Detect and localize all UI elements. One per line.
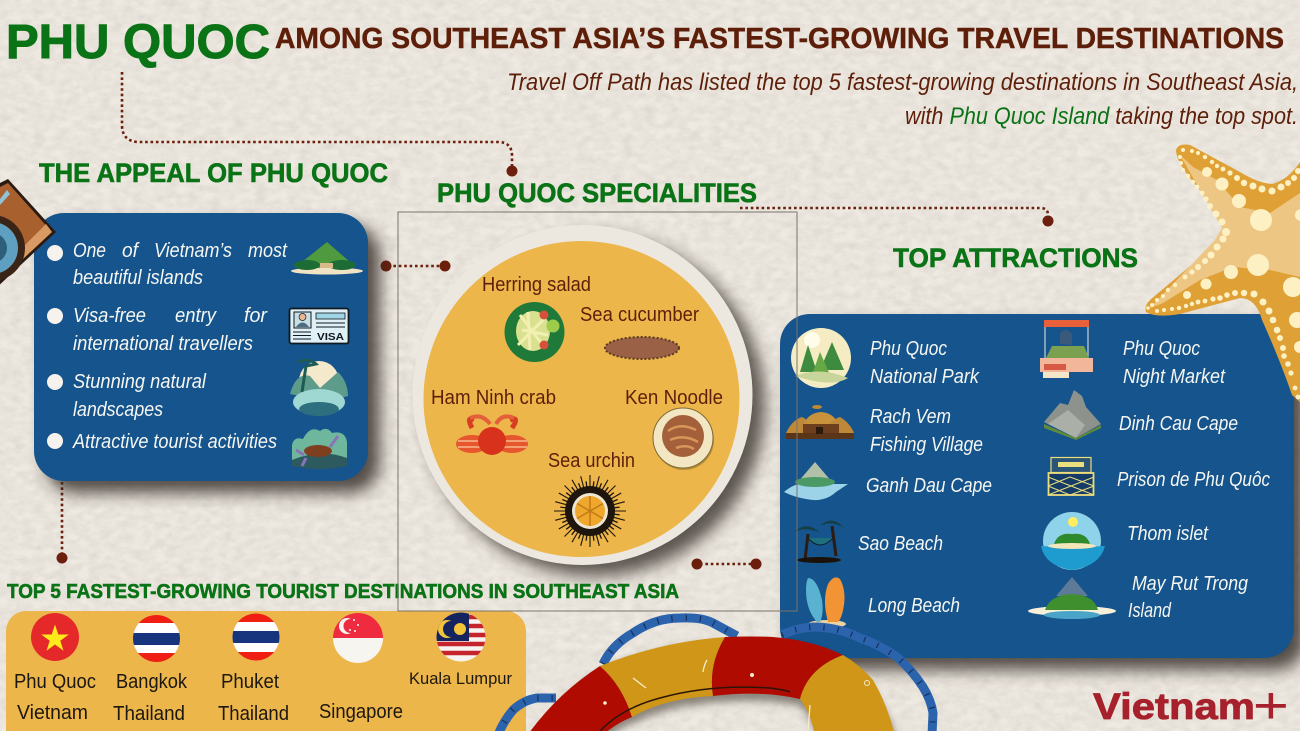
item: visa: Visa-free: [73, 305, 146, 327]
item: islands: Vietnam’s: [154, 240, 232, 262]
item: visa: [47, 305, 268, 355]
connector: appeal to top 5: [56, 482, 68, 564]
icon: Ganh Dau Cape: [784, 462, 848, 500]
attraction: Phu Quoc Night Market: [1123, 338, 1226, 388]
item: landscapes: Stunning natural: [73, 371, 207, 393]
labels: Bangkok, Thailand: [113, 671, 188, 725]
flag: Singapore: [333, 613, 383, 663]
panel: attractions: [780, 314, 1300, 670]
attraction: May Rut Trong Island: May Rut Trong: [1132, 573, 1248, 595]
labels: Phu Quoc, Vietnam: Phu Quoc: [14, 671, 96, 693]
item: activities: Attractive tourist activities: [72, 431, 277, 453]
panel: top 5 destinations: TOP 5 FASTEST-GROWING TOURIST DESTINATIONS IN SOUTHEAST ASIA: [7, 580, 679, 603]
labels: Phuket, Thailand: Phuket: [221, 671, 279, 693]
connector: appeal to specialities: [380, 260, 450, 272]
flag: Vietnam: [31, 613, 79, 661]
heading: attractions: TOP ATTRACTIONS: [893, 243, 1138, 273]
icon: herring salad: [504, 302, 564, 362]
flag: Thailand (Phuket): [232, 614, 280, 660]
icon: night market stall: [1040, 320, 1093, 378]
item: islands: One: [73, 240, 106, 262]
icon: ken noodle plate: [653, 408, 714, 470]
heading: specialities: PHU QUOC SPECIALITIES: [437, 178, 757, 208]
labels: Phu Quoc, Vietnam: [14, 671, 96, 724]
attraction: Rach Vem Fishing Village: [870, 406, 983, 456]
attraction: Prison de Phu Quoc: Prison de Phu Quôc: [1117, 469, 1270, 491]
icon: sea cucumber: [605, 337, 679, 359]
label: Singapore: Singapore: [319, 701, 403, 723]
label: herring salad: Herring salad: [482, 274, 591, 296]
panel: specialities circle: [412, 225, 765, 576]
label: ham ninh crab: Ham Ninh crab: [431, 387, 556, 409]
connector: title to specialities: [122, 72, 518, 176]
attraction: Dinh Cau Cape: Dinh Cau Cape: [1119, 413, 1238, 435]
heading: appeal: THE APPEAL OF PHU QUOC: [39, 158, 388, 188]
thin frame: [398, 212, 797, 611]
icon: sea urchin: [554, 475, 626, 547]
attraction: Ganh Dau Cape: Ganh Dau Cape: [866, 475, 992, 497]
icon: island: [291, 242, 363, 274]
icon: national park: [791, 328, 851, 388]
attraction: Phu Quoc National Park: Phu Quoc: [870, 338, 947, 360]
labels: Phu Quoc, Vietnam: Vietnam: [17, 702, 88, 724]
title: PHU QUOC: [6, 16, 270, 69]
item: visa: entry: [175, 305, 217, 327]
label: Kuala Lumpur: Kuala Lumpur: [409, 669, 512, 688]
item: visa: for: [244, 305, 268, 327]
attraction: Rach Vem Fishing Village: Fishing Village: [870, 434, 983, 456]
item: visa: international travellers: [73, 333, 253, 355]
item: landscapes: landscapes: [73, 399, 163, 421]
connector: specialities to attractions: [740, 208, 1054, 226]
panel: top 5 destinations: [6, 580, 679, 731]
icon: crab: [456, 416, 528, 455]
icon: visa card: VISA: [317, 332, 344, 343]
item: islands: [47, 240, 288, 289]
labels: Phuket, Thailand: [218, 671, 289, 725]
icon: May Rut island: [1028, 577, 1116, 619]
attraction: Phu Quoc National Park: [870, 338, 980, 388]
connector: specialities to attractions list: [692, 558, 762, 570]
labels: Bangkok, Thailand: Thailand: [113, 703, 185, 725]
attraction: May Rut Trong Island: [1128, 573, 1248, 622]
label: sea cucumber: Sea cucumber: [580, 304, 699, 326]
icon: Dinh Cau rocks: [1044, 390, 1101, 440]
icon: visa card: [290, 308, 348, 344]
label: sea urchin: Sea urchin: [548, 450, 635, 472]
label: ken noodle: Ken Noodle: [625, 387, 723, 409]
attraction: Phu Quoc Night Market: Phu Quoc: [1123, 338, 1200, 360]
icon: Sao Beach hammock: [794, 520, 844, 563]
panel: appeal: [34, 213, 380, 493]
attraction: May Rut Trong Island: Island: [1128, 600, 1172, 622]
attraction: Sao Beach: Sao Beach: [858, 533, 943, 555]
item: islands: beautiful islands: [73, 267, 203, 289]
flag: Malaysia: [436, 612, 486, 662]
icon: starfish: [1146, 145, 1300, 402]
attraction: Rach Vem Fishing Village: Rach Vem: [870, 406, 951, 428]
headline: AMONG SOUTHEAST ASIA’S FASTEST-GROWING TRAVEL DESTINATIONS: [275, 23, 1284, 55]
attraction: Long Beach: Long Beach: [868, 595, 960, 617]
icon: prison: [1048, 458, 1094, 495]
icon: surfboards: [806, 577, 846, 628]
intro text: [507, 69, 1298, 130]
icon: turtle diving: [292, 429, 347, 469]
item: islands: of: [122, 240, 140, 262]
labels: Bangkok, Thailand: Bangkok: [116, 671, 188, 693]
attraction: Phu Quoc Night Market: Night Market: [1123, 366, 1226, 388]
flag: Thailand (Bangkok): [133, 615, 180, 662]
icon: lifebuoy: [498, 618, 933, 731]
attraction: Phu Quoc National Park: National Park: [870, 366, 980, 388]
labels: Phuket, Thailand: Thailand: [218, 703, 289, 725]
logo: Vietnam+: [1093, 677, 1288, 731]
icon: camera: [0, 179, 56, 290]
icon: Thom islet: [1041, 512, 1105, 570]
item: landscapes: [47, 371, 207, 421]
icon: natural landscape: [290, 360, 348, 416]
icon: huts: [786, 405, 854, 439]
attraction: Thom islet: Thom islet: [1127, 523, 1209, 545]
logo: Vietnam+: Vietnam: [1093, 686, 1255, 727]
item: islands: most: [248, 240, 288, 262]
